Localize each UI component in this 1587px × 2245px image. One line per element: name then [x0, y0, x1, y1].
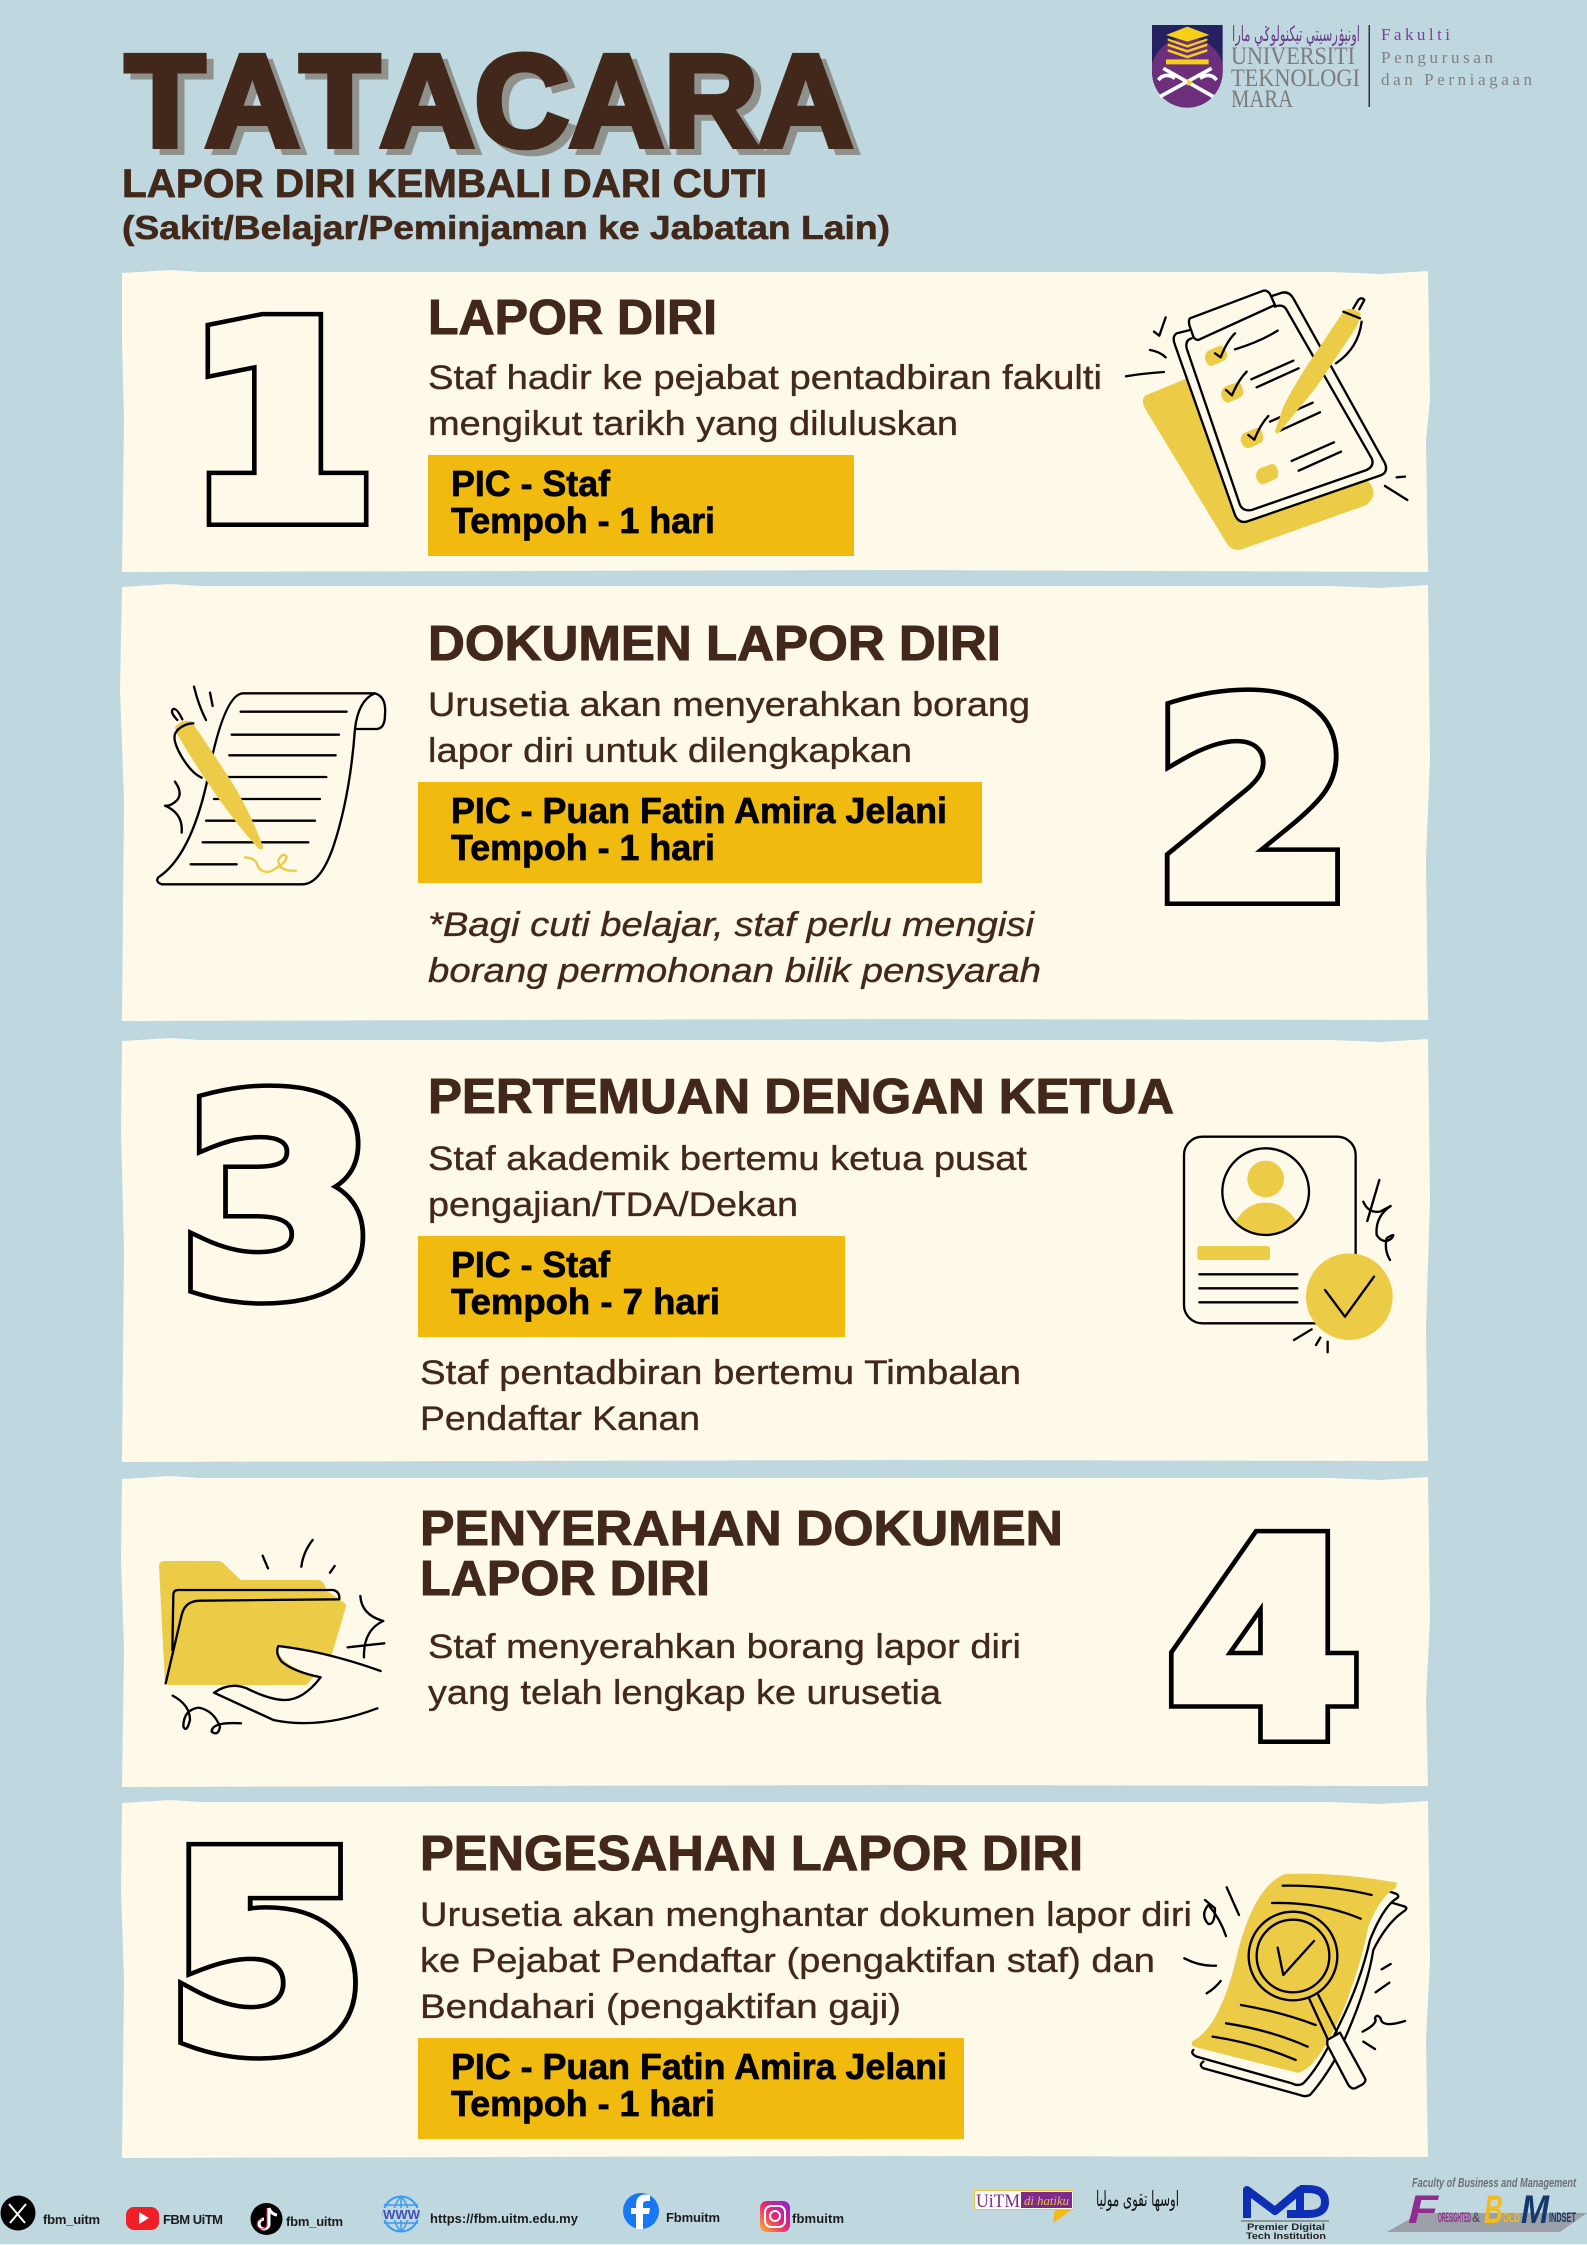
description: administrative staff [420, 1354, 1021, 1438]
description: ke Pejabat Pendaftar (pengaktifan staf) dan [420, 1942, 1155, 1980]
logo: UiTM di hatiku: UiTM [976, 2191, 1020, 2212]
PIC box [428, 455, 854, 556]
text: X handle: fbm_uitm [43, 2212, 100, 2227]
icon: clipboard checklist [1126, 291, 1407, 550]
description: yang telah lengkap ke urusetia [428, 1674, 941, 1712]
logo: Premier Digital Tech Institution: Tech Institution [1246, 2231, 1326, 2242]
logo text: faculty name [1381, 25, 1532, 89]
description [428, 359, 1102, 443]
description: administrative staff: Pendaftar Kanan [420, 1400, 700, 1438]
heading: PERTEMUAN DENGAN KETUA [428, 1070, 1174, 1124]
title: TATACARA: TATACARA [132, 33, 860, 180]
logo: FBM foresighted and bold mindset: ORESIGHTED [1438, 2209, 1471, 2225]
footer: social media links [0, 2193, 844, 2235]
logo text: faculty name: Pengurusan [1381, 48, 1494, 67]
note: study leave [428, 906, 1041, 990]
motto: Jawi: اوسها تقوى موليا [1096, 2187, 1179, 2211]
note: study leave: borang permohonan bilik pensyarah [428, 952, 1041, 990]
number 4: 4 [1168, 1488, 1360, 1796]
description: academic staff: pengajian/TDA/Dekan [428, 1186, 798, 1224]
logo: FBM foresighted and bold mindset: F [1408, 2188, 1440, 2232]
description: Staf hadir ke pejabat pentadbiran fakulti [428, 359, 1102, 397]
logo text: faculty name: dan Perniagaan [1381, 70, 1532, 89]
heading: PENYERAHAN DOKUMEN [420, 1502, 1063, 1556]
icon: website globe [383, 2196, 421, 2232]
icon: website globe: WWW [383, 2207, 421, 2222]
panel 2: dokumen lapor diri [120, 584, 1430, 1021]
logo: UiTM di hatiku: di hatiku [1024, 2193, 1069, 2208]
logo text: university name: MARA [1231, 86, 1293, 113]
PIC box [418, 1236, 845, 1337]
number 3: 3 [181, 1046, 376, 1354]
description: Bendahari (pengaktifan gaji) [420, 1988, 901, 2026]
icon: YouTube [126, 2207, 159, 2230]
heading: LAPOR DIRI [428, 291, 717, 345]
logo: FBM foresighted and bold mindset: & [1472, 2209, 1480, 2225]
number 1: 1 [186, 271, 376, 579]
icon: X [0, 2196, 36, 2230]
description: mengikut tarikh yang diluluskan [428, 405, 958, 443]
icon: Facebook [623, 2193, 659, 2229]
icon: folder and hand [159, 1540, 384, 1733]
description: administrative staff: Staf pentadbiran bertemu Timbalan [420, 1354, 1021, 1392]
logo: FBM foresighted and bold mindset [1387, 2175, 1587, 2232]
text: Facebook handle: Fbmuitm [666, 2210, 720, 2225]
logo text: university name: TEKNOLOGI [1231, 65, 1360, 92]
subtitle: LAPOR DIRI KEMBALI DARI CUTI [122, 162, 767, 206]
heading: PENGESAHAN LAPOR DIRI [420, 1827, 1083, 1881]
PIC box [418, 2038, 964, 2139]
icon: Instagram [760, 2201, 790, 2232]
panel 1: lapor diri [122, 270, 1430, 579]
logo: FBM foresighted and bold mindset: OLD [1503, 2209, 1520, 2225]
note: study leave: *Bagi cuti belajar, staf perlu mengisi [428, 906, 1036, 944]
logo: FBM foresighted and bold mindset: M [1521, 2188, 1550, 2232]
PIC box: Tempoh - 7 hari [451, 1281, 720, 1322]
panel 4: penyerahan dokumen [121, 1476, 1430, 1796]
description [420, 1896, 1192, 2026]
description: academic staff [428, 1140, 1028, 1224]
number 5: 5 [168, 1801, 366, 2109]
panel 3: pertemuan dengan ketua [121, 1038, 1430, 1462]
icon: TikTok [250, 2203, 282, 2235]
heading: DOKUMEN LAPOR DIRI [428, 617, 1001, 671]
description [428, 1628, 1021, 1712]
PIC box: PIC - Puan Fatin Amira Jelani [451, 790, 947, 831]
logo: FBM foresighted and bold mindset: B [1484, 2188, 1503, 2232]
number 3: 3 [181, 1046, 376, 1354]
description: Urusetia akan menyerahkan borang [428, 686, 1030, 724]
number 1: 1 [186, 271, 376, 579]
icon: profile document with check [1184, 1137, 1393, 1352]
number 5: 5 [168, 1801, 366, 2109]
logo: UiTM di hatiku [974, 2190, 1074, 2223]
logo text: university name: UNIVERSITI [1231, 43, 1355, 70]
description: Staf menyerahkan borang lapor diri [428, 1628, 1021, 1666]
title: TATACARA: TATACARA [125, 27, 853, 174]
description: lapor diri untuk dilengkapkan [428, 732, 912, 770]
logo text: faculty name: Fakulti [1381, 25, 1450, 44]
PIC box: PIC - Staf [451, 463, 611, 504]
number 2: 2 [1154, 650, 1353, 958]
heading [420, 1502, 1063, 1606]
number 4: 4 [1168, 1488, 1360, 1796]
heading: LAPOR DIRI [420, 1552, 710, 1606]
PIC box: Tempoh - 1 hari [451, 827, 715, 868]
icon: papers and magnifier [1184, 1874, 1406, 2096]
number 2: 2 [1154, 650, 1353, 958]
text: website address: https://fbm.uitm.edu.my [430, 2211, 579, 2226]
subtitle: leave types: (Sakit/Belajar/Peminjaman ke Jabatan Lain) [122, 209, 890, 246]
PIC box: Tempoh - 1 hari [451, 500, 715, 541]
description: academic staff: Staf akademik bertemu ketua pusat [428, 1140, 1028, 1178]
logo text: Jawi name: اونيۏرسيتي تيكنولوݢي مارا [1232, 22, 1360, 46]
PIC box: PIC - Puan Fatin Amira Jelani [451, 2046, 947, 2087]
panel 5: pengesahan lapor diri [121, 1800, 1430, 2158]
PIC box: PIC - Staf [451, 1244, 611, 1285]
icon: UiTM shield [1152, 25, 1223, 108]
PIC box: Tempoh - 1 hari [451, 2083, 715, 2124]
description [428, 686, 1030, 770]
text: YouTube handle: FBM UiTM [163, 2212, 223, 2227]
PIC box [418, 782, 982, 883]
description: Urusetia akan menghantar dokumen lapor diri [420, 1896, 1192, 1934]
icon: document and pen [157, 687, 385, 884]
logo: UiTM faculty [1152, 22, 1532, 113]
logo text: university name [1231, 43, 1360, 113]
text: Instagram handle: fbmuitm [792, 2211, 844, 2226]
text: TikTok handle: fbm_uitm [286, 2214, 343, 2229]
logo: Premier Digital Tech Institution: Premier Digital [1247, 2222, 1325, 2233]
logo: Premier Digital Tech Institution [1241, 2189, 1329, 2242]
